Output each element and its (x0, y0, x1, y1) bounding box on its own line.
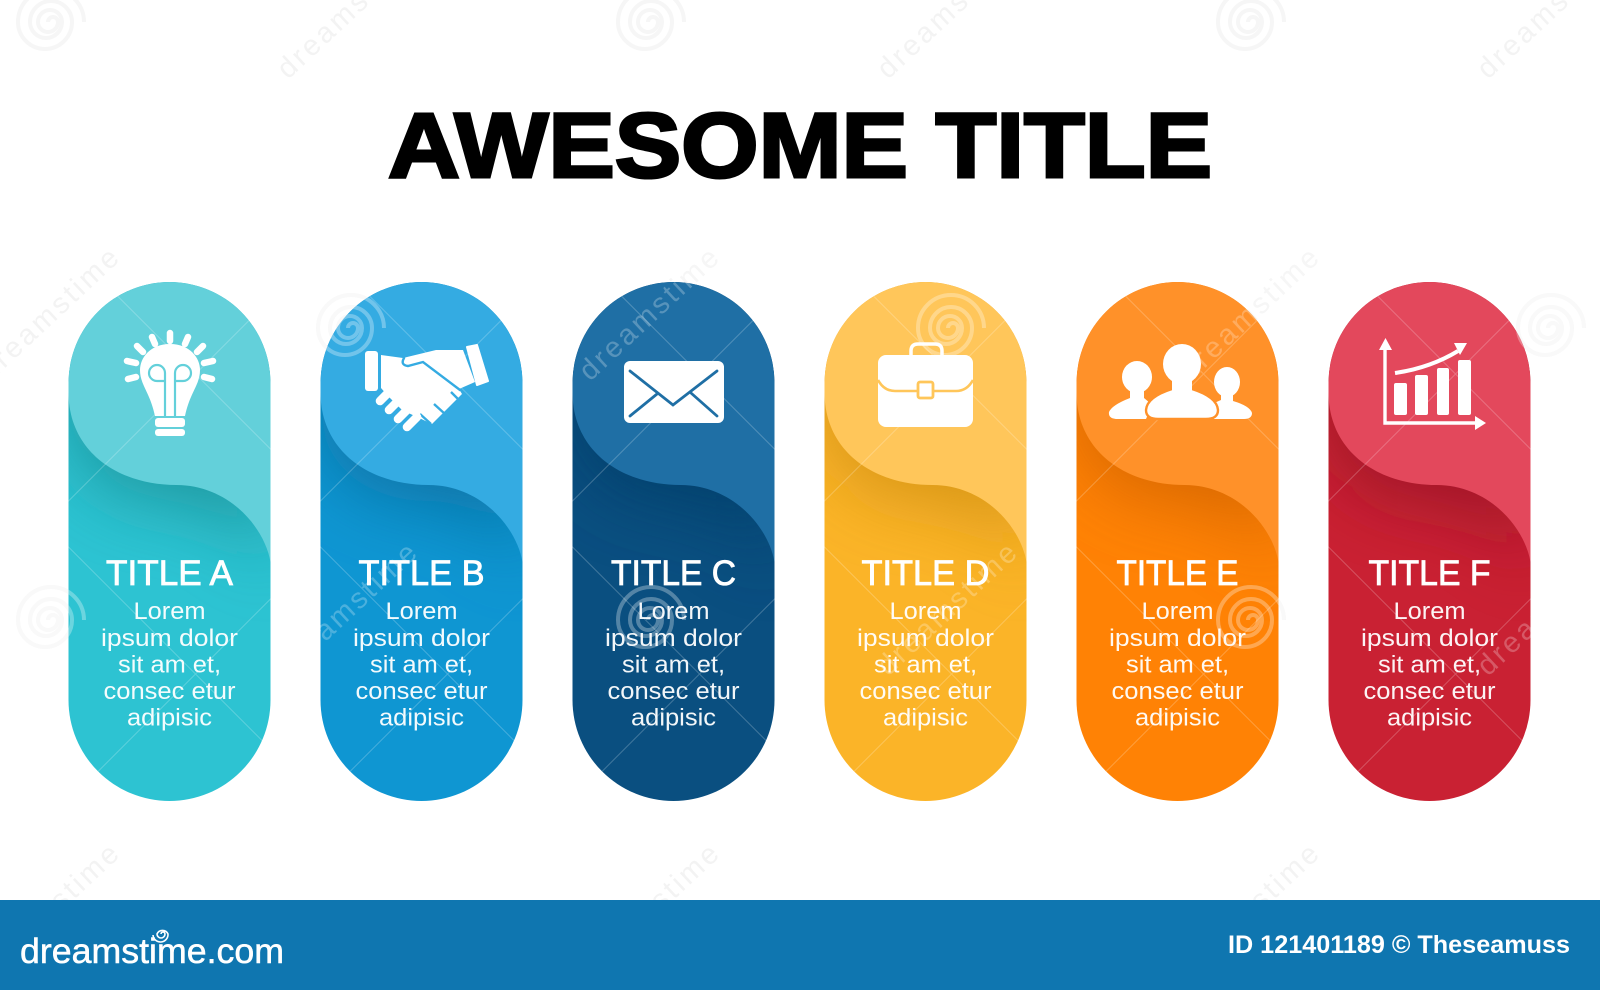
text: title D block: consec etur (860, 678, 992, 705)
text: dreamstime (573, 836, 728, 983)
text: title E block: consec etur (1112, 678, 1244, 705)
text: title F block (1361, 554, 1498, 732)
text: dreamstime (1173, 240, 1328, 387)
icon: envelope (624, 361, 724, 423)
text: title C block (605, 554, 742, 732)
text: title C block: sit am et, (622, 652, 725, 678)
text: title E block: ipsum dolor (1109, 625, 1246, 652)
icon: light bulb (127, 333, 213, 436)
text: title A block: Lorem (134, 598, 206, 625)
icon: handshake (365, 345, 488, 427)
text: dreamstime (1173, 836, 1328, 983)
footer band (0, 900, 1600, 990)
text: title E block: TITLE E (1116, 554, 1238, 593)
text: title C block: adipisic (631, 704, 716, 732)
text: title A block: ipsum dolor (101, 625, 238, 652)
text: title D block: ipsum dolor (857, 625, 994, 652)
icon: growth chart (1379, 338, 1486, 430)
panel: title C pill (572, 282, 774, 801)
text: title E block: sit am et, (1126, 652, 1229, 678)
text: title E block (1109, 554, 1246, 732)
text: title C block: TITLE C (611, 554, 736, 593)
text: title F block: ipsum dolor (1361, 625, 1498, 652)
panel: title F pill (1328, 282, 1530, 801)
text: title B block (353, 554, 490, 732)
panel: title A pill (68, 282, 270, 801)
panel: title E pill (1076, 282, 1278, 801)
text: title F block: TITLE F (1368, 554, 1490, 593)
panel: title D pill (824, 282, 1026, 801)
footer credit text: ID 121401189 © Theseamuss (1228, 931, 1570, 959)
text: title D block: Lorem (890, 598, 962, 625)
text: dreamstime (1173, 240, 1328, 387)
text: dreamstime (573, 240, 728, 387)
text: dreamstime (871, 535, 1026, 682)
text: title E block: Lorem (1142, 598, 1214, 625)
text: title E block: adipisic (1135, 704, 1220, 732)
text: title D block: TITLE D (862, 554, 990, 593)
text: title A block: sit am et, (118, 652, 221, 678)
text: title B block: ipsum dolor (353, 625, 490, 652)
text: title F block: Lorem (1394, 598, 1466, 625)
text: title A block: adipisic (127, 704, 212, 732)
icon: briefcase (878, 344, 973, 427)
text: title D block: sit am et, (874, 652, 977, 678)
footer logo: dreamstime.com: dreamstime.com (20, 932, 284, 971)
text: title B block: TITLE B (358, 554, 484, 593)
panel: title B pill (320, 282, 522, 801)
text: title B block: consec etur (356, 678, 488, 705)
text: title D block: adipisic (883, 704, 968, 732)
text: title A block: TITLE A (106, 554, 234, 593)
text: title C block: Lorem (638, 598, 710, 625)
text: title D block (857, 554, 994, 732)
text: title A block: consec etur (104, 678, 236, 705)
text: title F block: adipisic (1387, 704, 1472, 732)
text: title B block: Lorem (386, 598, 458, 625)
text: title B block: sit am et, (370, 652, 473, 678)
text: title C block: ipsum dolor (605, 625, 742, 652)
text: dreamstime (573, 240, 728, 387)
text: title C block: consec etur (608, 678, 740, 705)
text: title B block: adipisic (379, 704, 464, 732)
title: AWESOME TITLE (388, 95, 1212, 197)
text: dreamstime (271, 535, 426, 682)
text: title A block (101, 554, 238, 732)
text: title F block: consec etur (1364, 678, 1496, 705)
text: title F block: sit am et, (1378, 652, 1481, 678)
icon: people group (1109, 344, 1252, 419)
